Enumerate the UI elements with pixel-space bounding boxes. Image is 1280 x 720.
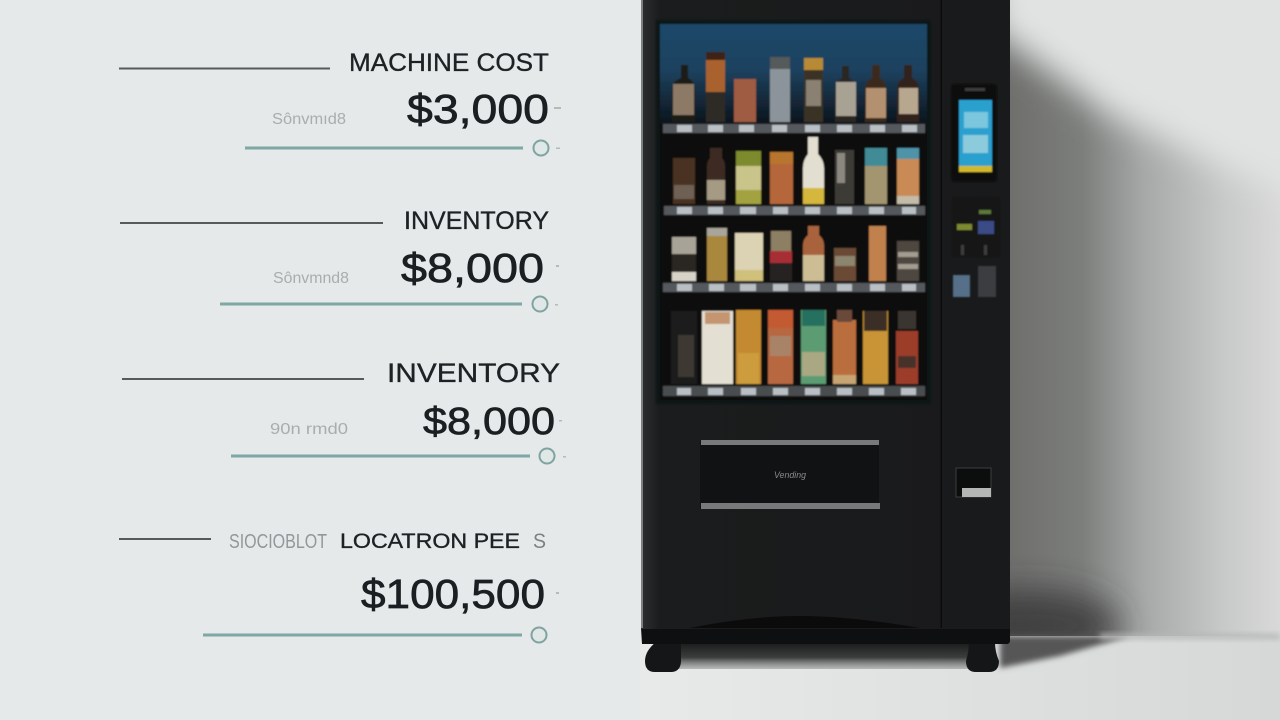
display window [656, 20, 931, 404]
wall shadow [940, 0, 1280, 661]
cost item: inventory: Sônvmnd8 [273, 270, 349, 287]
machine feet [645, 642, 999, 672]
shelf row 3 rail [663, 283, 925, 292]
cost item: inventory repeat: $8,000 [423, 401, 555, 443]
touchscreen [951, 84, 997, 182]
cost item: machine cost: $3,000 [407, 86, 549, 132]
payment panel [952, 197, 1000, 297]
cost item: location fees [119, 530, 559, 642]
shadow under machine [672, 640, 972, 669]
shelf row 3 products [672, 226, 919, 281]
cost item: machine cost [119, 49, 561, 156]
shelf row 2 rail [664, 206, 925, 215]
cost item: inventory repeat: 90n rmd0 [270, 421, 348, 438]
shelf row 4 rail [663, 386, 925, 396]
shelf row 1 products [672, 52, 919, 122]
cost item: location fees: $100,500 [361, 571, 545, 617]
cost item: location fees: S [533, 530, 546, 553]
vending machine [641, 0, 1010, 672]
cost item: machine cost: Sônvmıd8 [272, 111, 346, 128]
delivery flap [700, 440, 880, 509]
cost item: machine cost: MACHINE COST [349, 49, 549, 77]
cost item: inventory [120, 207, 559, 312]
cost item: inventory repeat [122, 358, 566, 464]
floor [640, 634, 1280, 720]
machine base [641, 628, 1010, 644]
cost item: inventory repeat: INVENTORY [387, 358, 560, 388]
machine cabinet [641, 0, 1010, 629]
shelf row 4 products [671, 310, 918, 384]
door divider [940, 0, 942, 628]
panel: cost list [119, 49, 566, 642]
cost item: location fees: SIOCIOBLOT [229, 531, 327, 553]
cost item: inventory: $8,000 [401, 245, 544, 291]
base curve [690, 616, 920, 628]
flap logo: Vending [774, 470, 806, 480]
blue back panel [660, 24, 927, 124]
coin return [956, 468, 991, 497]
shelf row 1 rail [663, 124, 925, 133]
cost item: location fees: LOCATRON PEE [340, 530, 520, 553]
shelf row 2 products [673, 137, 919, 204]
cost item: inventory: INVENTORY [404, 207, 549, 235]
